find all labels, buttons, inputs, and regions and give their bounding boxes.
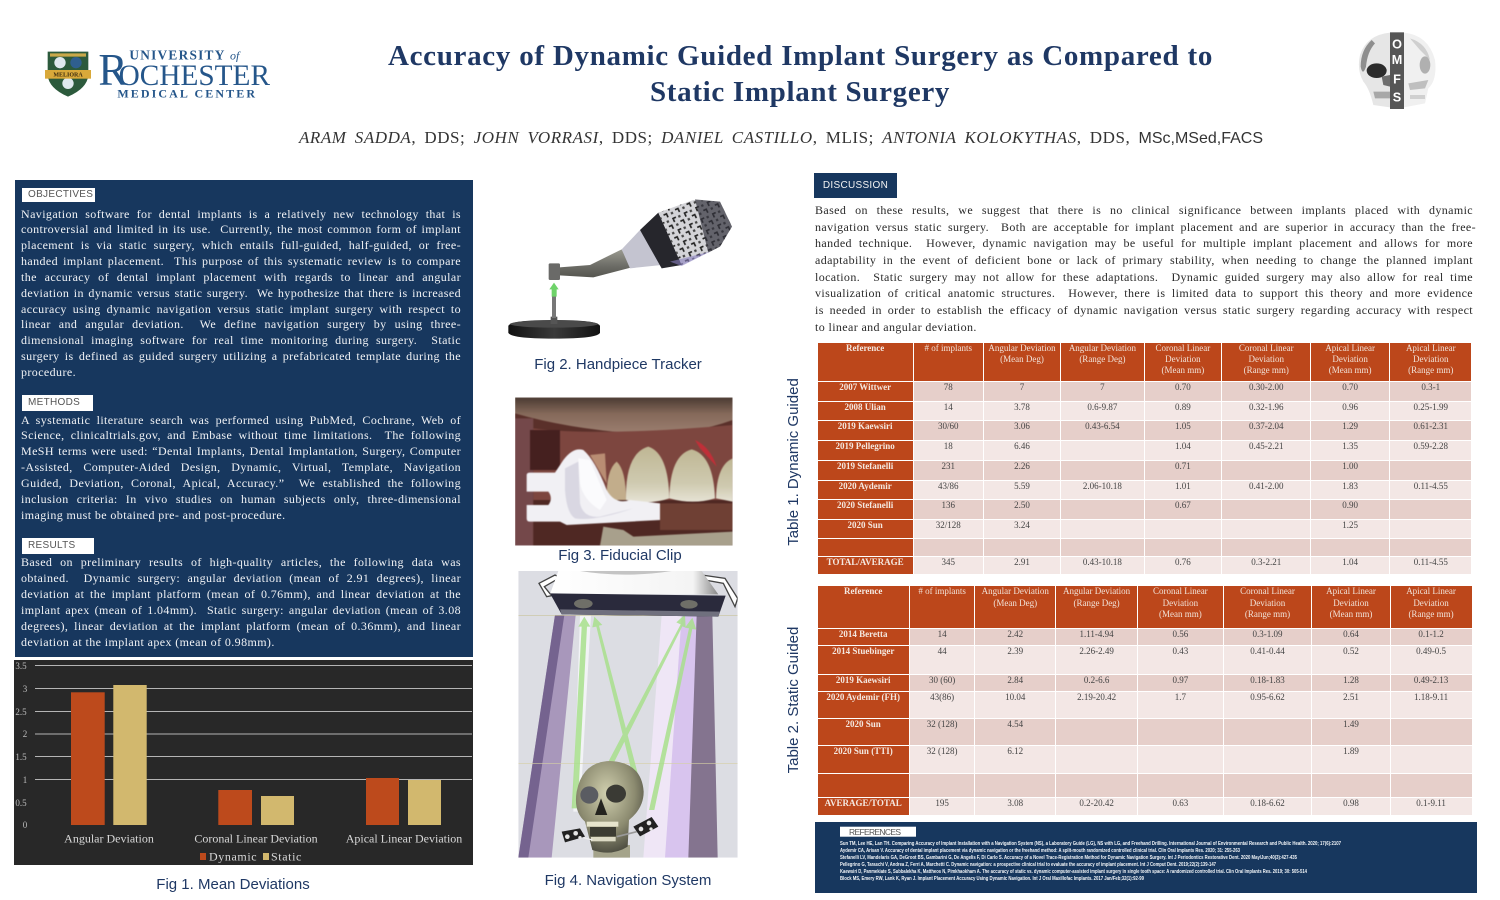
OMFS band: M [1392, 53, 1402, 67]
y axis labels: 1 [23, 775, 27, 785]
table 2: static guided: 2020 Sun (TTI) [834, 746, 893, 756]
text block: reference list [840, 841, 1341, 882]
table 2: static guided [818, 586, 1472, 815]
text block: reference list: Aydemir CA, Arisan V. Accuracy of dental implant placement via dynamic navigation or the freehand method: A split-mouth randomized controlled clinical trial. Clin Oral Implants Res. 2020; 31: 255-263 [840, 848, 1240, 854]
table 1: dynamic guided: 0.6-9.87 [1087, 402, 1117, 412]
table 1: dynamic guided: 78 [944, 382, 953, 392]
icon: shield crest [45, 52, 91, 97]
table 2: static guided: 44 [938, 646, 947, 656]
y axis labels: 2.5 [15, 707, 27, 717]
text block: methods: MeSH terms were used: “Dental Implants, Dental Implantation, Surgery, Computer [21, 444, 461, 458]
table 2: static guided: Coronal Linear [1153, 586, 1208, 596]
table 2: static guided: 0.18-6.62 [1250, 798, 1285, 808]
text block: results: obtained. Dynamic surgery: angular deviation (mean of 2.91 degrees), linear [21, 571, 461, 585]
y axis labels: 2 [23, 729, 27, 739]
table 1: dynamic guided: (Mean Deg) [1000, 354, 1044, 364]
table 1: dynamic guided: Deviation [1413, 354, 1449, 364]
text block: objectives [21, 207, 461, 379]
table 2: static guided: 0.52 [1343, 646, 1359, 656]
camera bar [539, 571, 738, 617]
legend [200, 850, 302, 864]
OMFS band: O [1392, 37, 1402, 51]
text block: reference list: Block MS, Emery RW, Lank K, Ryan J. Implant Placement Accuracy Using Dynamic Navigation. Int J Oral Maxillofac Implants. 2017 Jan/Feb;32(1):92-99 [840, 876, 1144, 882]
table 2: static guided: 0.63 [1172, 798, 1188, 808]
table 2: static guided: Deviation [1163, 598, 1198, 608]
table 2: static guided: (Range mm) [1245, 609, 1290, 619]
table 1: dynamic guided: 1.05 [1175, 421, 1191, 431]
caption: figure 4: Fig 4. Navigation System [545, 872, 711, 888]
heading: methods [22, 395, 93, 411]
table 2: static guided: 2020 Sun [846, 719, 881, 729]
table 1: dynamic guided: 2019 Kaewsiri [838, 421, 893, 431]
table 2: static guided: Apical Linear [1326, 586, 1376, 596]
table 2: static guided: 2.26-2.49 [1079, 646, 1114, 656]
text block: objectives: deviation in dynamic versus static surgery. We hypothesize that there is increased [21, 286, 461, 300]
table 1: dynamic guided: 136 [941, 500, 955, 510]
text block: discussion: visualization of critical anatomic structures. However, there is limited data to support this theory and more evidence [815, 286, 1473, 300]
text block: objectives: Navigation software for dental implants is a relatively new technology that is [21, 207, 461, 221]
icon: skull halves [1359, 33, 1435, 107]
table 1: dynamic guided: 1.25 [1342, 520, 1358, 530]
table 1: dynamic guided: 345 [941, 557, 955, 567]
table 1: dynamic guided: 1.01 [1175, 481, 1191, 491]
table 1: dynamic guided: 2.26 [1014, 461, 1030, 471]
table 1: dynamic guided: Deviation [1332, 354, 1368, 364]
y axis labels: 0 [23, 820, 28, 830]
y axis labels: 0.5 [15, 798, 27, 808]
table 2: static guided: 2.51 [1343, 692, 1359, 702]
table 1: dynamic guided: 0.11-4.55 [1414, 557, 1448, 567]
table 2: static guided: 0.3-1.09 [1253, 629, 1283, 639]
heading: results [22, 538, 94, 554]
table 2: static guided: 0.1-1.2 [1418, 629, 1444, 639]
table 1: dynamic guided: 3.06 [1014, 421, 1030, 431]
text block: objectives: dimensional imaging software for real time monitoring during surgery. Static [21, 333, 461, 347]
table 1: dynamic guided: 0.43-6.54 [1085, 421, 1120, 431]
panel: objectives, methods, results [15, 180, 473, 657]
table 2: static guided: Reference [844, 586, 882, 596]
table 2: static guided: AVERAGE/TOTAL [825, 798, 902, 808]
authors: ARAM SADDA, DDS; JOHN VORRASI, DDS; DANIEL CASTILLO, MLIS; ANTONIA KOLOKYTHAS, DDS, MSc,MSed,FACS [299, 128, 1263, 147]
text block: results: deviation at the implant apex (mean of 0.98mm). [21, 635, 275, 649]
text block: objectives: handed implant placement. This purpose of this systematic review is to compare [21, 254, 461, 268]
table 1: dynamic guided: 231 [941, 461, 955, 471]
table 2: static guided: 10.04 [1005, 692, 1025, 702]
table 1: dynamic guided: 0.89 [1175, 402, 1191, 412]
caption: figure 3: Fig 3. Fiducial Clip [558, 546, 682, 564]
text block: methods: inclusion criteria: In vivo studies on human subjects only, three-dimensional [21, 492, 461, 506]
legend: Dynamic [209, 850, 257, 864]
table 2: static guided: 6.12 [1007, 746, 1023, 756]
table 2: static guided: 2014 Beretta [839, 629, 887, 639]
table 1: dynamic guided: # of implants [924, 343, 972, 353]
disc base [508, 296, 600, 339]
table 1: dynamic guided: (Range mm) [1244, 365, 1289, 375]
table 2: static guided: Deviation [1250, 598, 1285, 608]
text block: discussion: is needed in order to establish the efficacy of dynamic navigation versus static surgery regarding accuracy with respect [815, 303, 1473, 317]
table 1: dynamic guided: 0.41-2.00 [1249, 481, 1283, 491]
text block: results: Based on preliminary results of high-quality articles, the following data was [21, 555, 461, 569]
y axis labels: 1.5 [15, 752, 27, 762]
table 1: dynamic guided: 18 [944, 441, 953, 451]
table 2: static guided: # of implants [918, 586, 966, 596]
text block: results: degrees), linear deviation at the implant platform (mean of 0.36mm), and linear [21, 619, 461, 633]
table 1: dynamic guided: 2008 Ulian [845, 402, 886, 412]
table 2: static guided: 2.19-20.42 [1077, 692, 1116, 702]
table 1: dynamic guided: 0.90 [1342, 500, 1358, 510]
table 1: dynamic guided: 0.76 [1175, 557, 1191, 567]
table 2: static guided: 195 [935, 798, 949, 808]
text block: results: implant apex (mean of 1.04mm). Static surgery: angular deviation (mean of 3.08 [21, 603, 461, 617]
table 1: dynamic guided: 2.06-10.18 [1083, 481, 1122, 491]
table 2: static guided: 2.84 [1007, 675, 1023, 685]
table 1: dynamic guided: 2.91 [1014, 557, 1030, 567]
table 1: dynamic guided: 2019 Pellegrino [836, 441, 895, 451]
heading: table 1 rotated label: Table 1. Dynamic Guided [785, 378, 802, 546]
OMFS band: S [1393, 91, 1401, 105]
table 1: dynamic guided: 0.70 [1342, 382, 1358, 392]
table 1: dynamic guided: 1.04 [1342, 557, 1358, 567]
category labels: Apical Linear Deviation [346, 832, 462, 846]
title: Accuracy of Dynamic Guided Implant Surgery as Compared to [388, 40, 1213, 72]
table 1: dynamic guided: 14 [944, 402, 953, 412]
table 1: dynamic guided: TOTAL/AVERAGE [827, 557, 904, 567]
logo wordmark: of [230, 48, 241, 62]
text block: methods: Science, clinicaltrials.gov, and Embase without time limitations. The following [21, 428, 461, 442]
figure 3: fiducial clip photo [515, 397, 733, 546]
table 1: dynamic guided: 0.11-4.55 [1414, 481, 1448, 491]
logo wordmark: OCHESTER [119, 59, 270, 92]
table 2: static guided: 2014 Stuebinger [832, 646, 894, 656]
bars: static [113, 685, 441, 825]
text block: discussion: navigation versus static surgery. Both are acceptable for implant placement and are superior in accuracy than the free- [815, 220, 1476, 234]
table 2: static guided: Coronal Linear [1240, 586, 1295, 596]
upper lip [515, 397, 733, 434]
text block: discussion: adaptability in the event of deficient bone or lack of primary stability, when needing to change the planned implant [815, 253, 1473, 267]
heading: references [840, 827, 916, 837]
table 1: dynamic guided: 1.04 [1175, 441, 1191, 451]
table 1: dynamic guided: 0.37-2.04 [1249, 421, 1283, 431]
table 2: static guided: 0.95-6.62 [1250, 692, 1285, 702]
table 1: dynamic guided: 7 [1100, 382, 1105, 392]
table 1: dynamic guided: 5.59 [1014, 481, 1030, 491]
table 1: dynamic guided: 1.83 [1342, 481, 1358, 491]
table 1: dynamic guided: 0.71 [1175, 461, 1191, 471]
caption: figure 2: Fig 2. Handpiece Tracker [534, 356, 702, 372]
table 2: static guided: 1.7 [1175, 692, 1186, 702]
tracker [658, 199, 732, 266]
table 2: static guided: 0.97 [1172, 675, 1188, 685]
bars: dynamic [71, 692, 399, 825]
table 2: static guided: 0.2-6.6 [1084, 675, 1109, 685]
table 1: dynamic guided: 6.46 [1014, 441, 1030, 451]
teeth [607, 462, 626, 500]
table 1: dynamic guided: Coronal Linear [1239, 343, 1294, 353]
text block: reference list: Kaewsiri D, Panmekiate S, Subbalekha K, Mattheos N, Pimkhaokham A. The accuracy of static vs. dynamic computer-assisted implant surgery in single tooth space: A randomized controlled trial. Clin Oral Implants Res. 2019; 30: 505-514 [840, 869, 1307, 875]
table 2: static guided: 0.49-2.13 [1414, 675, 1448, 685]
table 1: dynamic guided: 0.30-2.00 [1249, 382, 1283, 392]
bar chart: mean deviations [14, 660, 473, 865]
table 1: dynamic guided: Coronal Linear [1156, 343, 1210, 353]
table 1: dynamic guided: 0.25-1.99 [1414, 402, 1448, 412]
skull with trackers [562, 761, 658, 858]
figure 4: navigation system [518, 571, 738, 858]
table 2: static guided: 32 (128) [927, 719, 958, 729]
caption: figure 1: Fig 1. Mean Deviations [156, 876, 310, 892]
heading: discussion [814, 173, 897, 198]
table 1: dynamic guided: 0.43-10.18 [1083, 557, 1122, 567]
OMFS band [1390, 32, 1404, 109]
text block: methods: -Assisted, Computer-Aided Design, Dynamic, Virtual, Template, Navigation [21, 460, 461, 474]
table 1: dynamic guided: 30/60 [938, 421, 958, 431]
OMFS band: F [1393, 72, 1401, 86]
table 1: dynamic guided: 2007 Wittwer [839, 382, 891, 392]
text block: objectives: the accuracy of dental implant placement with regards to linear and angular [21, 270, 461, 284]
heading: discussion: DISCUSSION [823, 180, 888, 191]
table 2: static guided: 0.18-1.83 [1250, 675, 1285, 685]
table 2: static guided: Deviation [1333, 598, 1369, 608]
table 2: static guided: 0.56 [1172, 629, 1188, 639]
table 1: dynamic guided: Apical Linear [1406, 343, 1456, 353]
table 2: static guided: (Mean mm) [1159, 609, 1202, 619]
logo: OMFS skull [1359, 32, 1436, 109]
green rays [572, 614, 696, 810]
category labels [64, 832, 462, 846]
text block: results [21, 555, 461, 649]
table 1: dynamic guided: 32/128 [936, 520, 961, 530]
table 1: dynamic guided: 2020 Aydemir [839, 481, 892, 491]
table 1: dynamic guided: (Range mm) [1408, 365, 1453, 375]
table 1: dynamic guided: 43/86 [938, 481, 958, 491]
table 1: dynamic guided: 2020 Sun [848, 520, 883, 530]
table 1: dynamic guided: 1.00 [1342, 461, 1358, 471]
table 2: static guided: Angular Deviation [1063, 586, 1130, 596]
table 1: dynamic guided: Reference [846, 343, 884, 353]
table 2: static guided: 0.98 [1343, 798, 1359, 808]
y axis labels [15, 661, 28, 830]
table 2: static guided: Apical Linear [1406, 586, 1456, 596]
table 2: static guided: 43(86) [930, 692, 954, 702]
table 2: static guided: Angular Deviation [982, 586, 1049, 596]
table 2: static guided: 4.54 [1007, 719, 1023, 729]
table 2: static guided: 0.2-20.42 [1079, 798, 1114, 808]
text block: discussion: Based on these results, we suggest that there is no clinical significance between implants placed with dynamic [815, 203, 1473, 217]
table 1: dynamic guided: 0.3-2.21 [1251, 557, 1281, 567]
table 1: dynamic guided: 0.59-2.28 [1414, 441, 1448, 451]
table 1: dynamic guided: 1.29 [1342, 421, 1358, 431]
table 1: dynamic guided: (Mean mm) [1162, 365, 1204, 375]
table 2: static guided: Deviation [1413, 598, 1449, 608]
table 2: static guided: (Mean mm) [1330, 609, 1372, 619]
table 2: static guided: 1.11-4.94 [1079, 629, 1114, 639]
table 2: static guided: 1.89 [1343, 746, 1359, 756]
logo: University of Rochester Medical Center [45, 44, 270, 100]
table 2: static guided: (Range mm) [1408, 609, 1454, 619]
white clip [527, 449, 660, 525]
table 1: dynamic guided: 3.24 [1014, 520, 1030, 530]
text block: objectives: accuracy using dynamic navigation versus static implant surgery with respect to [21, 302, 461, 316]
gum [533, 425, 733, 500]
heading: references: REFERENCES [849, 827, 901, 837]
text block: discussion: to linear and angular deviation. [815, 320, 977, 334]
table 2: static guided: 0.49-0.5 [1416, 646, 1446, 656]
table 2: static guided: (Mean Deg) [993, 598, 1037, 608]
text block: objectives: surgery is defined as guided surgery utilizing a prefabricated template during the [21, 349, 461, 363]
table 1: dynamic guided: (Mean mm) [1329, 365, 1372, 375]
table 1: dynamic guided: 0.45-2.21 [1249, 441, 1283, 451]
text block: methods [21, 413, 461, 522]
light beams left [518, 615, 591, 858]
table 2: static guided: 32 (128) [927, 746, 958, 756]
text block: discussion: location. Static surgery may not allow for these adaptations. Dynamic guided surgery may also allow for real time [815, 270, 1473, 284]
text block: objectives: controversial and limited in its use. Currently, the most common form of implant [21, 222, 461, 236]
table 2: static guided: 1.28 [1343, 675, 1359, 685]
text block: discussion: handed technique. However, dynamic navigation may be useful for multiple implant placement and allows for more [815, 236, 1473, 250]
table 2: static guided: 2.42 [1007, 629, 1023, 639]
text block: reference list: Stefanelli LV, Mandelaris GA, DeGroot BS, Gambarini G, De Angelis F, Di Carlo S. Accuracy of a Novel Trace-Registration Method for Dynamic Navigation Surgery. Int J Periodontics Restorative Dent. 2020 May/Jun;40(3):427-435 [840, 855, 1297, 861]
logo wordmark: MEDICAL CENTER [117, 86, 255, 100]
logo wordmark: UNIVERSITY [129, 47, 225, 62]
logo wordmark [98, 44, 270, 100]
table 2: static guided: 1.49 [1343, 719, 1359, 729]
table 1: dynamic guided: 0.61-2.31 [1414, 421, 1448, 431]
title [388, 40, 1213, 108]
table 2: static guided: 3.08 [1007, 798, 1023, 808]
figure 2: handpiece tracker [508, 199, 732, 339]
table 1: dynamic guided: 1.35 [1342, 441, 1358, 451]
lower area [533, 500, 733, 546]
table 2: static guided: 0.43 [1172, 646, 1188, 656]
table 2: static guided: (Range Deg) [1073, 598, 1120, 608]
heading: results: RESULTS [28, 540, 75, 551]
legend: Static [271, 850, 302, 864]
table 2: static guided: 2020 Aydemir (FH) [826, 692, 900, 702]
table 2: static guided: 1.18-9.11 [1414, 692, 1448, 702]
table 2: static guided: 30 (60) [929, 675, 955, 685]
text block: reference list: Sun TM, Lee HE, Lan TH. Comparing Accuracy of Implant Installation with a Navigation System (NS), a Laboratory Guide (LG), NS with LG, and Freehand Drilling. International Journal of Environmental Research and Public Health. 2020; 17(6):2107 [840, 841, 1341, 847]
green arrow [549, 283, 559, 297]
heading: objectives: OBJECTIVES [28, 189, 93, 200]
category labels: Coronal Linear Deviation [194, 832, 318, 846]
table 1: dynamic guided: 0.32-1.96 [1249, 402, 1283, 412]
handpiece [549, 213, 682, 280]
text block: discussion [815, 203, 1476, 334]
table 2: static guided: 2.39 [1007, 646, 1023, 656]
table 1: dynamic guided: 0.70 [1175, 382, 1191, 392]
title: Static Implant Surgery [650, 76, 950, 108]
table 1: dynamic guided: 2020 Stefanelli [837, 500, 893, 510]
text block: reference list: Pellegrino G, Taraschi V, Andrea Z, Ferri A, Marchetti C. Dynamic navigation: a prospective clinical trial to evaluate the accuracy of implant placement. Int J Comput Dent. 2019;22(2):139-147 [840, 862, 1216, 868]
table 1: dynamic guided: Angular Deviation [988, 343, 1056, 353]
table 1: dynamic guided: Angular Deviation [1069, 343, 1136, 353]
table 1: dynamic guided: 7 [1020, 382, 1024, 392]
table 2: static guided: 14 [938, 629, 947, 639]
table 1: dynamic guided [818, 343, 1471, 574]
y axis labels: 3 [23, 684, 28, 694]
table 1: dynamic guided: 2.50 [1014, 500, 1030, 510]
table 1: dynamic guided: Deviation [1248, 354, 1284, 364]
icon: shield crest: MELIORA [53, 73, 83, 79]
table 1: dynamic guided: Deviation [1165, 354, 1201, 364]
table 1: dynamic guided: 0.96 [1342, 402, 1358, 412]
text block: results: deviation at the implant platform (mean of 0.76mm), and linear deviation at the [21, 587, 461, 601]
table 1: dynamic guided: 0.67 [1175, 500, 1191, 510]
logo wordmark: R [98, 44, 128, 95]
text block: methods: Guided, Deviation, Coronal, Apical, Accuracy.” We established the following [21, 476, 461, 490]
panel: references [815, 822, 1477, 893]
light beams right [643, 615, 718, 858]
table 2: static guided: 0.1-9.11 [1416, 798, 1446, 808]
heading: table 2 rotated label: Table 2. Static Guided [785, 627, 802, 773]
table 1: dynamic guided: 2019 Stefanelli [837, 461, 893, 471]
table 1: dynamic guided: 3.78 [1014, 402, 1030, 412]
table 2: static guided: 0.64 [1343, 629, 1359, 639]
text block: methods: A systematic literature search was performed using PubMed, Cochrane, Web of [21, 413, 461, 427]
heading: methods: METHODS [28, 397, 80, 408]
table 1: dynamic guided: (Range Deg) [1079, 354, 1126, 364]
table 2: static guided: 0.41-0.44 [1250, 646, 1285, 656]
y axis labels: 3.5 [15, 661, 27, 671]
table 2: static guided: 2019 Kaewsiri [836, 675, 891, 685]
category labels: Angular Deviation [64, 832, 154, 846]
text block: objectives: linear and angular deviation. We define navigation surgery by using three- [21, 317, 461, 331]
text block: objectives: procedure. [21, 365, 76, 379]
text block: methods: imaging must be obtained pre- and post-procedure. [21, 508, 286, 522]
text block: objectives: placement is via static surgery, which entails full-guided, half-guided, or free- [21, 238, 461, 252]
table 1: dynamic guided: 0.3-1 [1421, 382, 1440, 392]
table 1: dynamic guided: Apical Linear [1325, 343, 1375, 353]
